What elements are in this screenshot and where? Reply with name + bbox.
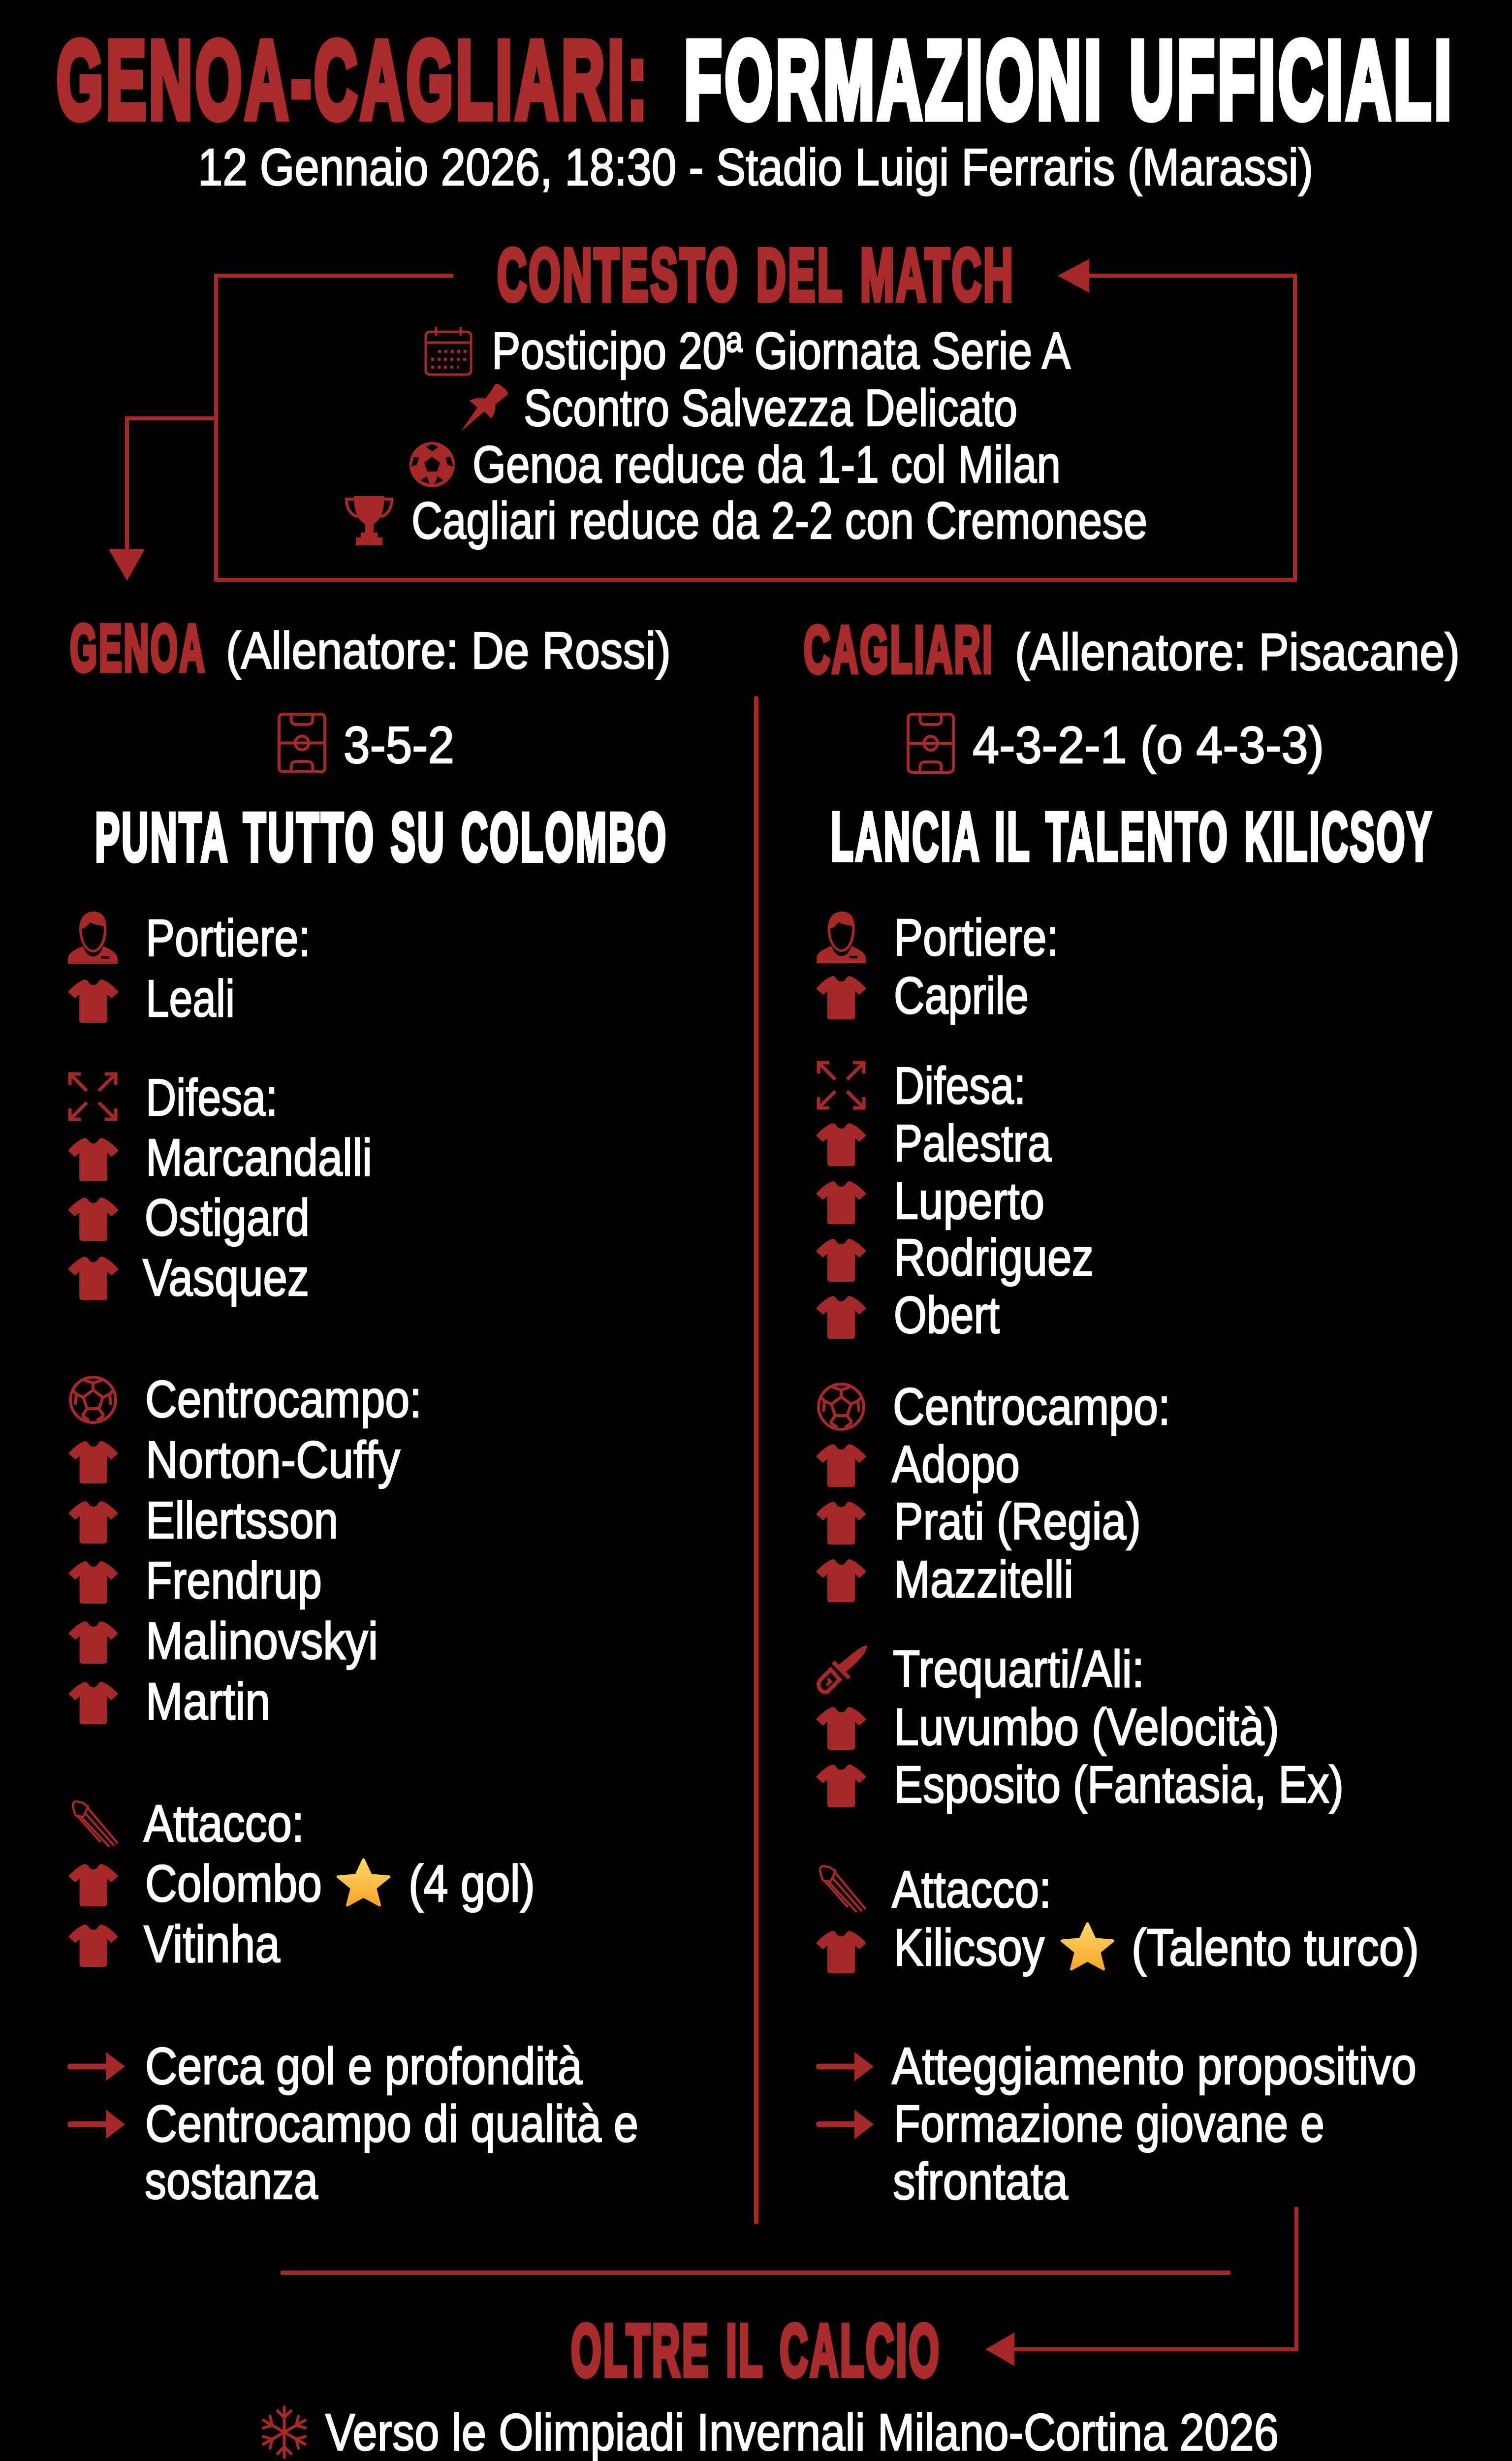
- text: marcandalli: Marcandalli: [146, 1129, 372, 1187]
- panel: contesto del match: [109, 233, 1295, 581]
- icon: calendar: [426, 327, 471, 375]
- frame connector: [216, 276, 1295, 580]
- text: modulo genoa: 3-5-2: [344, 716, 454, 774]
- text: modulo cagliari: 4-3-2-1 (o 4-3-3): [973, 716, 1324, 774]
- text: centrocampo: Centrocampo:: [145, 1370, 422, 1428]
- text: cerca gol: Cerca gol e profondità: [145, 2037, 582, 2095]
- icon: goalkeeper: [817, 912, 866, 963]
- text: kilicsoy: Kilicsoy: [894, 1919, 1044, 1977]
- icon: star: [338, 1860, 389, 1905]
- text: trequarti: Trequarti/Ali:: [893, 1640, 1144, 1698]
- text: olimpiadi: Verso le Olimpiadi Invernali Milano-Cortina 2026: [325, 2403, 1279, 2461]
- text: portiere: Portiere:: [894, 909, 1059, 967]
- icon: outline ball: [819, 1384, 864, 1429]
- icon: shirt: [816, 976, 866, 1019]
- icon: shirt: [68, 1682, 118, 1724]
- text: formazione giovane: sfrontata: [893, 2152, 1068, 2210]
- text: obert: Obert: [894, 1286, 1000, 1344]
- icon: shirt: [816, 1502, 866, 1545]
- arrow: bullet: [67, 2052, 125, 2081]
- text: martin: Martin: [146, 1672, 270, 1731]
- icon: shirt: [816, 1765, 866, 1807]
- panel: oltre il calcio: [260, 2309, 1279, 2461]
- icon: goalkeeper: [68, 912, 118, 964]
- icon: shirt: [816, 1181, 866, 1224]
- text: prati: Prati (Regia): [894, 1492, 1141, 1550]
- icon: pitch: [908, 714, 953, 772]
- text: rodriguez: Rodriguez: [894, 1229, 1094, 1287]
- text: difesa: Difesa:: [894, 1057, 1026, 1115]
- arrow: bullet: [67, 2110, 125, 2139]
- text: leali: Leali: [146, 970, 235, 1028]
- icon: pitch: [279, 714, 325, 772]
- icon: shirt: [68, 1441, 118, 1483]
- icon: trophy: [346, 496, 392, 545]
- arrow: frame top: [1058, 259, 1089, 293]
- icon: defence arrows: [819, 1063, 864, 1108]
- icon: shirt: [816, 1123, 866, 1166]
- icon: boot: [819, 1645, 867, 1692]
- text: ostigard: Ostigard: [145, 1189, 310, 1247]
- heading: oltre il calcio: OLTRE IL CALCIO: [571, 2309, 941, 2392]
- text: centrocampo di qualita: sostanza: [145, 2152, 318, 2210]
- icon: pushpin: [461, 384, 508, 432]
- heading: cagliari: CAGLIARI: [804, 612, 994, 687]
- icon: star: [1062, 1924, 1113, 1969]
- icon: defence arrows: [70, 1074, 116, 1119]
- text: centrocampo di qualita: [145, 2095, 638, 2210]
- text: frendrup: Frendrup: [146, 1551, 322, 1609]
- arrow: bullet: [816, 2110, 874, 2139]
- icon: shirt: [816, 1931, 866, 1973]
- text: luperto: Luperto: [894, 1172, 1044, 1230]
- text: formazione giovane: Formazione giovane e: [894, 2095, 1324, 2153]
- text: formazione giovane: [893, 2095, 1324, 2210]
- icon: shot: [820, 1866, 866, 1912]
- text: centrocampo di qualita: Centrocampo di qualità e: [145, 2095, 638, 2153]
- text: atteggiamento: Atteggiamento propositivo: [892, 2037, 1417, 2095]
- text: esposito: Esposito (Fantasia, Ex): [894, 1756, 1344, 1814]
- icon: shirt: [816, 1559, 866, 1602]
- text: mazzitelli: Mazzitelli: [894, 1550, 1073, 1609]
- subheading: genoa: PUNTA TUTTO SU COLOMBO: [95, 798, 668, 876]
- text: scontro: Scontro Salvezza Delicato: [524, 379, 1017, 437]
- icon: snowflake: [260, 2407, 309, 2458]
- panel: cagliari: [804, 612, 1460, 2210]
- icon: shirt: [816, 1444, 866, 1487]
- icon: shirt: [68, 1925, 118, 1967]
- arrow: to oltre il calcio: [985, 2207, 1296, 2366]
- panel: genoa: [67, 611, 671, 2210]
- icon: football: [410, 442, 455, 487]
- icon: shirt: [68, 1561, 118, 1604]
- text: cagliari reduce: Cagliari reduce da 2-2 con Cremonese: [411, 492, 1147, 550]
- subtitle: 12 Gennaio 2026, 18:30 - Stadio Luigi Ferraris (Marassi): [198, 138, 1313, 196]
- text: posticipo: Posticipo 20ª Giornata Serie A: [492, 322, 1071, 380]
- icon: outline ball: [70, 1377, 116, 1422]
- icon: shirt: [816, 1239, 866, 1282]
- divider between teams: [754, 696, 758, 2224]
- text: 4 gol: (4 gol): [409, 1855, 535, 1913]
- text: norton-cuffy: Norton-Cuffy: [146, 1431, 400, 1489]
- text: talento turco: (Talento turco): [1132, 1919, 1419, 1977]
- text: difesa: Difesa:: [146, 1069, 278, 1127]
- text: vitinha: Vitinha: [144, 1915, 280, 1973]
- text: malinovskyi: Malinovskyi: [146, 1612, 378, 1670]
- text: caprile: Caprile: [894, 967, 1029, 1025]
- text: luvumbo: Luvumbo (Velocità): [894, 1698, 1279, 1756]
- text: adopo: Adopo: [892, 1435, 1020, 1493]
- icon: shirt: [68, 1257, 119, 1300]
- text: genoa reduce: Genoa reduce da 1-1 col Milan: [472, 436, 1061, 494]
- arrow: bullet: [816, 2052, 874, 2081]
- title: red part: GENOA-CAGLIARI:: [57, 18, 650, 142]
- icon: shot: [73, 1801, 118, 1847]
- text: palestra: Palestra: [894, 1114, 1051, 1172]
- text: attacco: Attacco:: [144, 1795, 304, 1853]
- text: ellertsson: Ellertsson: [146, 1491, 338, 1549]
- icon: shirt: [816, 1707, 866, 1750]
- arrow: branch to Genoa: [109, 418, 216, 581]
- text: centrocampo: Centrocampo:: [893, 1378, 1170, 1436]
- heading: contesto: CONTESTO DEL MATCH: [497, 233, 1015, 316]
- icon: shirt: [68, 1138, 119, 1181]
- text: attacco: Attacco:: [892, 1861, 1051, 1919]
- connector line: [281, 2271, 1230, 2275]
- heading: genoa: GENOA: [70, 611, 206, 685]
- icon: shirt: [68, 1501, 118, 1544]
- icon: shirt: [816, 1296, 866, 1339]
- icon: shirt: [68, 1621, 118, 1664]
- text: vasquez: Vasquez: [143, 1249, 309, 1307]
- text: allenatore genoa: (Allenatore: De Rossi): [226, 622, 671, 680]
- icon: shirt: [68, 1864, 118, 1906]
- text: colombo: Colombo: [145, 1855, 322, 1913]
- text: portiere: Portiere:: [146, 909, 311, 967]
- icon: shirt: [68, 1198, 119, 1241]
- title: [57, 18, 1454, 142]
- icon: shirt: [68, 979, 119, 1023]
